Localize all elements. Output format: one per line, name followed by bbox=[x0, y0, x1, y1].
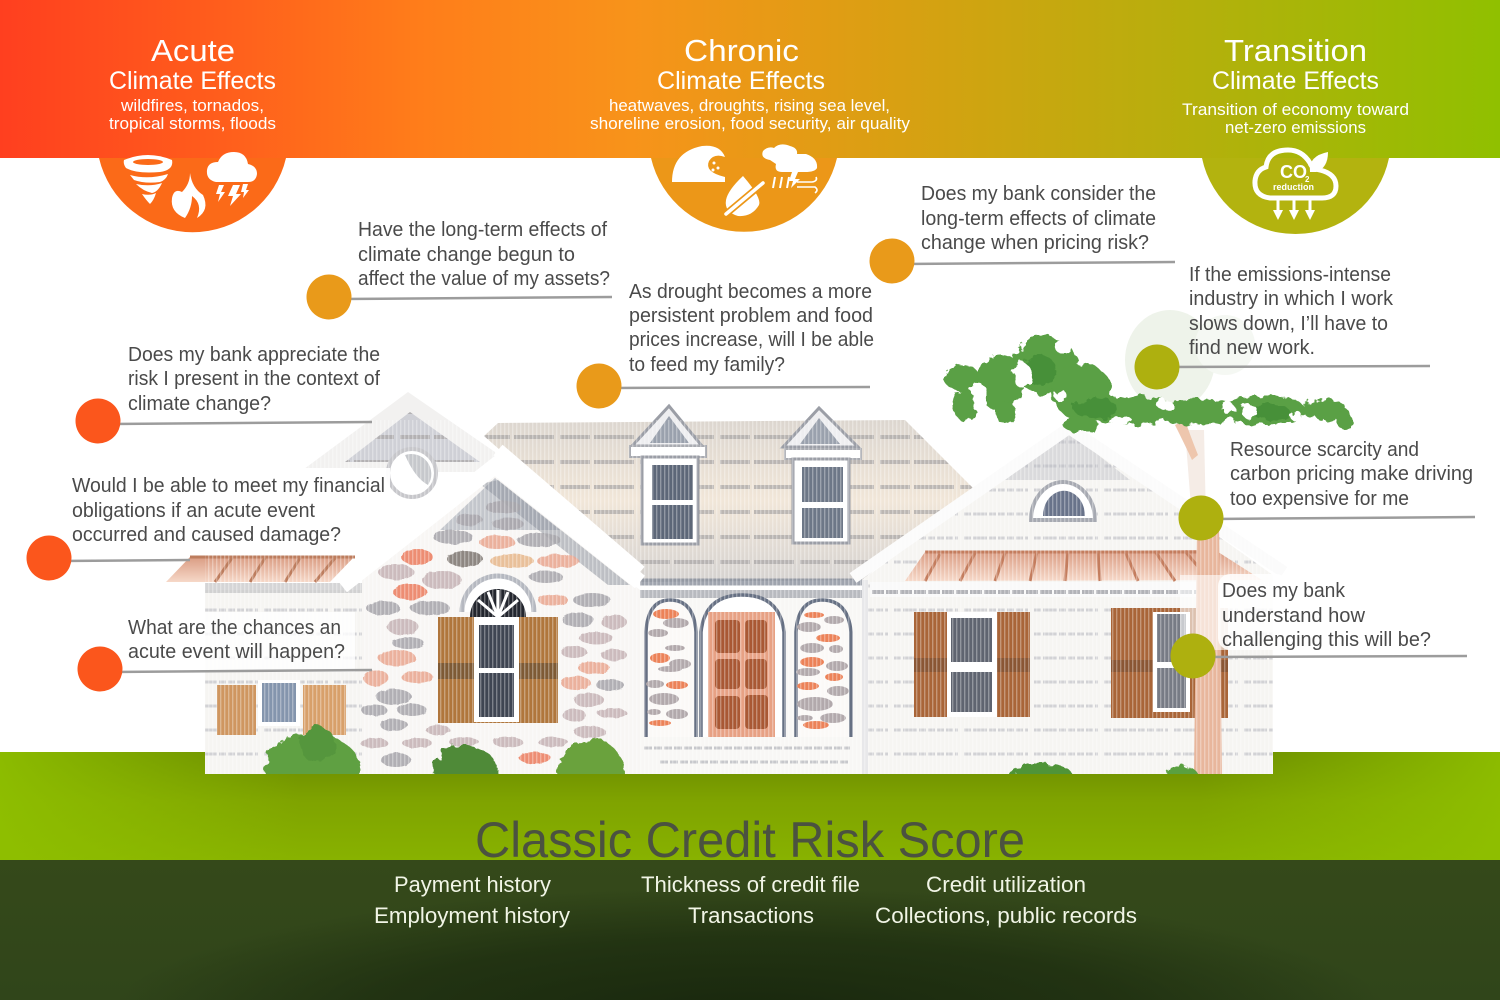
left wing awning bbox=[166, 556, 355, 582]
question: chances of acute event: acute event will happen? bbox=[128, 641, 345, 663]
transition half circle bbox=[1202, 158, 1389, 234]
icon: co2 reduction cloud bbox=[1255, 150, 1336, 220]
question: bank appreciates risk bbox=[76, 344, 380, 444]
bushes bbox=[263, 724, 1198, 774]
question: financial obligations bbox=[26, 475, 385, 580]
heading: chronic climate effects: shoreline erosion, food security, air quality bbox=[590, 114, 910, 133]
heading: transition climate effects: net-zero emissions bbox=[1225, 118, 1366, 137]
heading: classic credit risk score: Classic Credit Risk Score bbox=[475, 812, 1025, 868]
right awning bbox=[905, 550, 1262, 581]
text block: credit factors: Thickness of credit file bbox=[641, 872, 860, 897]
panel: credit factors footer bbox=[0, 860, 1500, 1000]
text block: credit factors bbox=[374, 872, 1137, 928]
heading: chronic climate effects: heatwaves, droughts, rising sea level, bbox=[609, 96, 890, 115]
question: bank appreciates risk: risk I present in the context of bbox=[128, 368, 380, 390]
chronic half circle bbox=[651, 158, 837, 232]
heading: chronic climate effects: Chronic bbox=[684, 33, 799, 68]
text block: credit factors: Employment history bbox=[374, 903, 570, 928]
question: drought and food prices: persistent problem and food bbox=[629, 305, 873, 327]
door bbox=[701, 595, 784, 737]
question: bank understanding challenge: Does my bank bbox=[1222, 580, 1346, 602]
icon: co2 reduction cloud: reduction bbox=[1273, 182, 1314, 192]
icon: flame bbox=[172, 173, 205, 218]
question: long-term effects on asset value: Have the long-term effects of bbox=[358, 219, 607, 241]
question: long-term effects on asset value: climate change begun to bbox=[358, 244, 575, 266]
text block: credit factors: Payment history bbox=[394, 872, 551, 897]
question: bank pricing risk: long-term effects of climate bbox=[921, 208, 1156, 230]
question: emissions-intense industry: industry in which I work bbox=[1189, 288, 1394, 310]
icon: co2 reduction cloud: CO bbox=[1280, 162, 1307, 182]
stones bbox=[360, 501, 627, 767]
heading: transition climate effects: Climate Effects bbox=[1212, 67, 1379, 95]
front window with shutters bbox=[914, 612, 1030, 717]
right gabled wing bbox=[853, 428, 1284, 774]
watercolor wash texture bbox=[205, 420, 1273, 774]
icon: tsunami wave bbox=[672, 146, 725, 182]
acute half circle bbox=[99, 158, 286, 232]
heading: acute climate effects: Climate Effects bbox=[109, 67, 276, 95]
question: chances of acute event bbox=[78, 617, 372, 692]
question: bank appreciates risk: Does my bank appreciate the bbox=[128, 344, 380, 366]
heading: acute climate effects: wildfires, tornados, bbox=[120, 96, 264, 115]
icon: rain cloud and wind bbox=[762, 144, 817, 193]
question: drought and food prices: prices increase, will I be able bbox=[629, 329, 874, 351]
main roof bbox=[484, 420, 975, 582]
header band bbox=[0, 0, 1500, 234]
heading: acute climate effects bbox=[109, 33, 276, 133]
question: emissions-intense industry: If the emissions-intense bbox=[1189, 264, 1391, 286]
faded tree behind text bbox=[1125, 310, 1255, 520]
question: long-term effects on asset value: affect the value of my assets? bbox=[358, 268, 610, 290]
icon: tornado bbox=[124, 155, 172, 204]
side window with shutters bbox=[1111, 608, 1228, 718]
heading: transition climate effects bbox=[1182, 33, 1409, 137]
question: bank pricing risk bbox=[870, 183, 1175, 284]
heading: acute climate effects: Acute bbox=[151, 33, 235, 68]
house illustration bbox=[166, 392, 1284, 811]
text block: credit factors: Credit utilization bbox=[926, 872, 1086, 897]
heading: transition climate effects: Transition bbox=[1224, 33, 1367, 68]
question: emissions-intense industry bbox=[1134, 264, 1430, 390]
heading: chronic climate effects bbox=[590, 33, 910, 133]
question: bank understanding challenge bbox=[1170, 580, 1467, 678]
question: bank pricing risk: Does my bank consider the bbox=[921, 183, 1156, 205]
heading: acute climate effects: tropical storms, floods bbox=[109, 114, 276, 133]
stone wing front gable bbox=[342, 450, 640, 774]
left wing window bbox=[217, 680, 346, 735]
question: financial obligations: obligations if an acute event bbox=[72, 500, 315, 522]
question: financial obligations: Would I be able to meet my financial bbox=[72, 475, 385, 497]
question: bank appreciates risk: climate change? bbox=[128, 393, 271, 415]
arched window with shutters bbox=[438, 576, 558, 723]
question: carbon pricing and driving: too expensive for me bbox=[1230, 488, 1409, 510]
tree foliage bbox=[944, 336, 1353, 460]
question: carbon pricing and driving bbox=[1178, 439, 1475, 540]
heading: transition climate effects: Transition of economy toward bbox=[1182, 100, 1409, 119]
tree trunk bbox=[1194, 520, 1222, 774]
question: drought and food prices bbox=[576, 281, 874, 408]
heading: chronic climate effects: Climate Effects bbox=[657, 67, 825, 95]
text block: credit factors: Collections, public records bbox=[875, 903, 1137, 928]
icon: no water drop bbox=[726, 176, 763, 216]
left low wing bbox=[166, 556, 365, 774]
question: carbon pricing and driving: Resource scarcity and bbox=[1230, 439, 1419, 461]
question: bank understanding challenge: challenging this will be? bbox=[1222, 629, 1431, 651]
question: chances of acute event: What are the chances an bbox=[128, 617, 341, 639]
gable half-moon window bbox=[1031, 482, 1095, 520]
translucent text backing panels bbox=[60, 468, 1288, 672]
question: carbon pricing and driving: carbon pricing make driving bbox=[1230, 463, 1473, 485]
question: financial obligations: occurred and caused damage? bbox=[72, 524, 341, 546]
question: drought and food prices: As drought becomes a more bbox=[629, 281, 872, 303]
icon: storm cloud bbox=[207, 152, 257, 206]
question: emissions-intense industry: slows down, I’ll have to bbox=[1189, 313, 1388, 335]
stone columns bbox=[646, 600, 851, 737]
question: long-term effects on asset value bbox=[306, 219, 612, 320]
icon: co2 reduction cloud: 2 bbox=[1305, 175, 1310, 184]
question: drought and food prices: to feed my family? bbox=[629, 354, 785, 376]
back left gable bbox=[300, 392, 500, 497]
question: emissions-intense industry: find new work. bbox=[1189, 337, 1315, 359]
central entrance with door bbox=[640, 590, 862, 774]
question: bank understanding challenge: understand how bbox=[1222, 605, 1366, 627]
dormer windows bbox=[630, 406, 861, 544]
text block: credit factors: Transactions bbox=[688, 903, 814, 928]
question: bank pricing risk: change when pricing risk? bbox=[921, 232, 1149, 254]
ground band: grass bbox=[0, 752, 1500, 860]
